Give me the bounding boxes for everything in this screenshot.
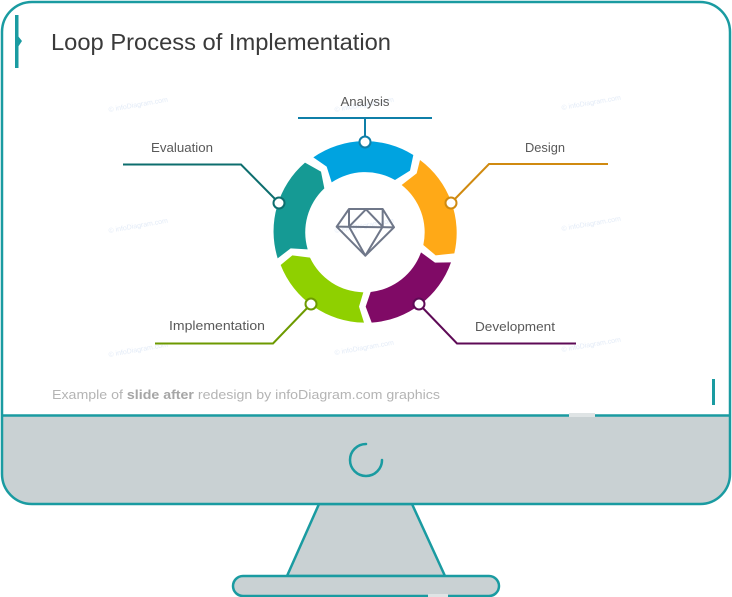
callout: implementation: Implementation	[169, 319, 265, 333]
watermarks	[108, 94, 622, 359]
icon: diamond	[337, 209, 394, 256]
callout: evaluation: Evaluation	[151, 141, 213, 155]
title accent bar	[15, 15, 22, 68]
watermarks: © infoDiagram.com	[334, 96, 395, 114]
loop ring diagram	[274, 141, 457, 323]
callout: design: Design	[525, 141, 565, 155]
segment: development	[366, 252, 451, 323]
watermarks: © infoDiagram.com	[334, 339, 395, 357]
callout: development	[414, 298, 576, 344]
segment: analysis	[313, 141, 413, 182]
callout: evaluation	[123, 141, 284, 208]
right accent bar	[712, 379, 715, 405]
callout: development: Development	[475, 320, 556, 334]
watermarks: © infoDiagram.com	[108, 96, 169, 114]
segment: evaluation	[274, 163, 324, 258]
segment: implementation	[281, 255, 364, 323]
callout: analysis: Analysis	[340, 95, 390, 109]
callout: analysis	[298, 95, 432, 148]
watermarks: © infoDiagram.com	[108, 341, 169, 359]
title: Loop Process of Implementation	[51, 29, 391, 55]
watermarks: © infoDiagram.com	[561, 215, 622, 233]
watermarks: © infoDiagram.com	[561, 336, 622, 354]
footer caption: Example of slide after redesign by infoDiagram.com graphics	[52, 387, 441, 402]
watermarks: © infoDiagram.com	[108, 217, 169, 235]
callout: implementation	[155, 298, 316, 344]
callout: design	[446, 141, 608, 208]
segment: design	[402, 160, 457, 255]
monitor stand	[287, 504, 445, 576]
monitor base	[233, 576, 499, 597]
watermarks: © infoDiagram.com	[561, 94, 622, 112]
icon: power spinner	[350, 444, 382, 476]
watermarks: © infoDiagram.com	[334, 217, 395, 235]
